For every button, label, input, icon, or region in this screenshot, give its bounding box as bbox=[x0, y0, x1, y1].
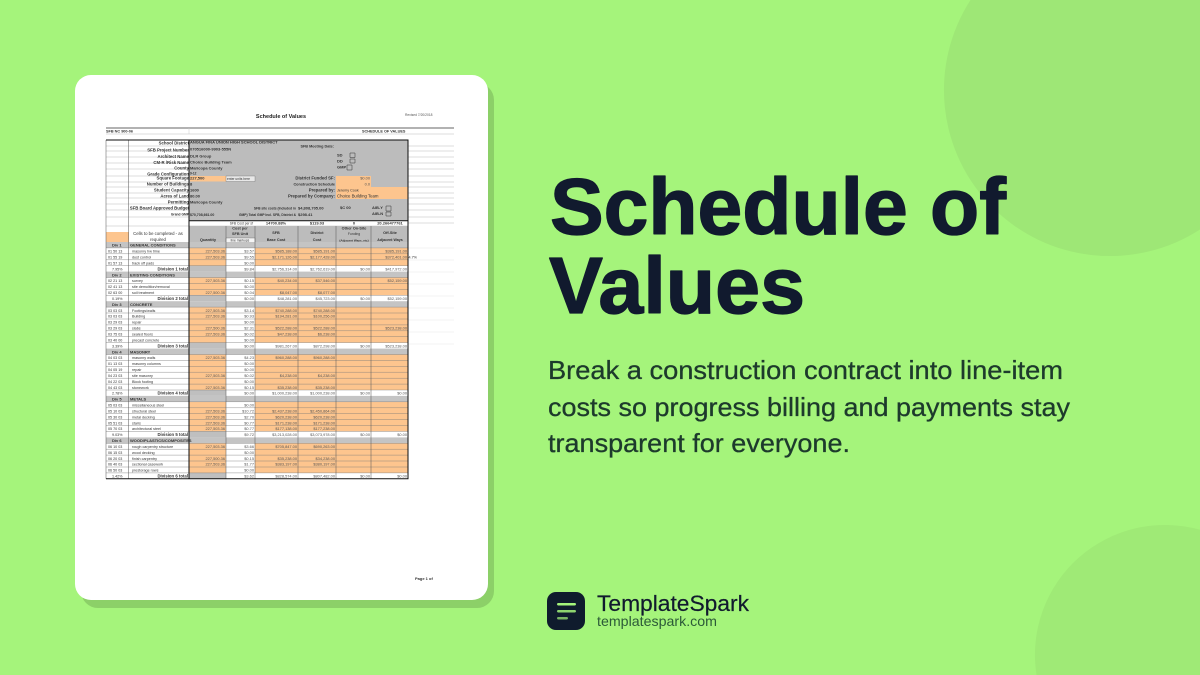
project information block: SFB Meeting Date: bbox=[300, 144, 334, 148]
column headers: Other On-Site bbox=[342, 226, 366, 230]
division 4 rows: 04 05 19 bbox=[108, 368, 122, 372]
decorative circle: bottom right bbox=[1035, 525, 1200, 675]
division 2 rows: $8,047.00 bbox=[280, 290, 298, 295]
division 1 rows: 01 50 13 bbox=[108, 250, 122, 254]
division 1 rows: track off pads bbox=[132, 262, 154, 266]
division 3 rows: $47,238.00 bbox=[278, 332, 298, 336]
division 3 rows: $2.31 bbox=[244, 326, 254, 331]
project information block: GMP) Total GMP Incl. SFB, District & bbox=[239, 213, 297, 217]
division 5 rows: $9.72 bbox=[244, 432, 254, 437]
division 6 rows: $3.66 bbox=[244, 444, 254, 449]
division 6 rows: $380,197.00 bbox=[313, 462, 336, 467]
division 1 rows: $417,972.00 bbox=[385, 266, 408, 271]
subtitle: costs so progress billing and payments stay bbox=[548, 392, 1070, 422]
division 1 rows: Division 1 total bbox=[157, 266, 188, 271]
form number row: SFB NC 900-06 bbox=[106, 130, 133, 134]
division 5 rows: $171,238.00 bbox=[313, 420, 336, 425]
division 5 rows: $2,437,238.00 bbox=[272, 408, 298, 414]
project information block: Maricopa County bbox=[190, 200, 223, 204]
division 2 rows: 02 63 00 bbox=[108, 291, 122, 295]
project information block: 227,500 bbox=[190, 176, 205, 180]
division 4 rows: repair bbox=[132, 368, 142, 372]
division 6 rows: 227,500.36 bbox=[206, 456, 225, 461]
division 3 rows: $740,288.00 bbox=[275, 308, 298, 313]
division 3 rows: $522,288.00 bbox=[275, 326, 298, 331]
division 3 rows bbox=[108, 302, 408, 348]
division 6 rows: Division 6 total bbox=[157, 474, 188, 479]
division 1 rows: $585,188.00 bbox=[275, 249, 298, 254]
division 6 rows: sectional casework bbox=[132, 463, 163, 467]
division 6 rows: 06 40 03 bbox=[108, 463, 122, 467]
division 2 rows: $40,234.00 bbox=[278, 278, 298, 283]
division 6 rows: $383,197.00 bbox=[275, 462, 298, 467]
division 4 rows: $4,238.00 bbox=[280, 373, 298, 378]
division 3 rows: repair bbox=[132, 321, 142, 325]
heading: Schedule of bbox=[550, 162, 1006, 251]
division 6 rows: $34,238.00 bbox=[316, 456, 336, 461]
project information block: AIB-Y bbox=[372, 205, 383, 210]
cost table fills bbox=[106, 140, 454, 479]
division 4 rows: stonework bbox=[132, 386, 149, 390]
division 3 rows: 03 29 03 bbox=[108, 321, 122, 325]
division 4 rows: 01 13 03 bbox=[108, 362, 122, 366]
division 5 rows: METALS bbox=[130, 397, 146, 402]
division 4 rows: $4.23 bbox=[244, 355, 254, 360]
project information block: enter units here bbox=[227, 177, 250, 181]
division 3 rows: precast concrete bbox=[132, 338, 159, 342]
division 5 rows: 05 70 03 bbox=[108, 427, 122, 431]
division 3 rows: Footings/walls bbox=[132, 309, 156, 313]
project information block: Construction Schedule bbox=[293, 182, 335, 186]
division 5 rows: 05 10 03 bbox=[108, 410, 122, 414]
division 5 rows: $0.00 bbox=[360, 432, 371, 437]
division 3 rows: slabs bbox=[132, 327, 141, 331]
division 4 rows: 04 22 03 bbox=[108, 380, 122, 384]
division 3 rows: $523,238.00 bbox=[385, 326, 408, 331]
column headers: SFB bbox=[272, 231, 280, 235]
division 6 rows: 227,503.36 bbox=[206, 444, 225, 449]
division 3 rows: $740,288.00 bbox=[313, 308, 336, 313]
division 5 rows: stairs bbox=[132, 421, 141, 425]
division 5 rows: Division 5 total bbox=[157, 432, 188, 437]
division 1 rows: $9.55 bbox=[244, 254, 254, 260]
division 6 rows: 227,503.36 bbox=[206, 462, 225, 467]
division 2 rows: 227,500.36 bbox=[206, 290, 225, 295]
division 5 rows: 227,503.36 bbox=[206, 420, 225, 425]
division 3 rows: 227,503.36 bbox=[206, 308, 225, 313]
division 3 rows: Building bbox=[132, 315, 145, 319]
division 5 rows: architectural steel bbox=[132, 427, 161, 431]
division 4 rows: 04 43 03 bbox=[108, 386, 122, 390]
division 6 rows: $0.15 bbox=[244, 456, 254, 461]
division 2 rows: Division 2 total bbox=[157, 296, 188, 301]
division 6 rows: Div 6 bbox=[112, 438, 122, 443]
division 6 rows: $0.00 bbox=[244, 450, 255, 455]
project information block: 8 bbox=[190, 182, 193, 186]
column headers: Quantity bbox=[200, 237, 217, 242]
division 5 rows: metal decking bbox=[132, 415, 155, 419]
project information block: 80.00 bbox=[190, 194, 201, 198]
division 4 rows: 227,503.36 bbox=[206, 373, 225, 378]
division 4 rows: site masonry bbox=[132, 374, 153, 378]
division 4 rows: $0.00 bbox=[397, 391, 408, 396]
division 3 rows: $0.00 bbox=[244, 343, 255, 348]
division 1 rows: 227,503.36 bbox=[206, 254, 225, 260]
project information block: Acres of Land bbox=[160, 194, 189, 198]
division 3 rows: $0.93 bbox=[244, 314, 254, 319]
project information block: SFB Board Approved Budget bbox=[130, 206, 190, 210]
icon: TemplateSpark logo bbox=[547, 592, 585, 630]
project information block bbox=[106, 140, 454, 226]
division 2 rows: $0.00 bbox=[244, 296, 255, 301]
division 1 rows: GENERAL CONDITIONS bbox=[130, 243, 176, 248]
division 5 rows: $0.77 bbox=[244, 426, 254, 431]
division 6 rows: $807,482.00 bbox=[313, 474, 336, 479]
project information block: Architect Name bbox=[157, 154, 190, 159]
division 2 rows: 0.19% bbox=[112, 297, 123, 301]
division 1 rows: $0.00 bbox=[360, 266, 371, 271]
division 4 rows: 04 23 03 bbox=[108, 374, 122, 378]
division 4 rows: 2.78% bbox=[112, 392, 123, 396]
division 2 rows: 227,503.36 bbox=[206, 278, 225, 283]
project information block: AIB-N bbox=[372, 211, 383, 216]
division 4 rows bbox=[108, 349, 408, 396]
division 2 rows: $0.00 bbox=[244, 284, 255, 289]
division 4 rows: $960,288.00 bbox=[313, 355, 336, 360]
division 5 rows: $171,238.00 bbox=[275, 420, 298, 425]
division 3 rows: $981,267.00 bbox=[275, 343, 298, 348]
division 4 rows: $1,000,238.00 bbox=[272, 391, 298, 396]
spreadsheet document bbox=[106, 113, 454, 581]
division 2 rows: $52,159.00 bbox=[388, 296, 408, 301]
division 6 rows: $705,847.00 bbox=[275, 444, 298, 449]
division 4 rows: $4,238.00 bbox=[318, 373, 336, 378]
project information block: CM-R /Risk Name bbox=[153, 160, 190, 165]
division 6 rows: 1.42% bbox=[112, 475, 123, 479]
project information block: 1600 bbox=[190, 188, 200, 192]
division 3 rows: $522,288.00 bbox=[313, 326, 336, 331]
summary row: SFB Cost per sf bbox=[230, 222, 253, 226]
division 2 rows: $37,546.00 bbox=[316, 278, 336, 283]
column headers: Base Cost bbox=[267, 238, 286, 242]
division 5 rows: $620,238.00 bbox=[313, 414, 336, 419]
division 6 rows: $0.00 bbox=[360, 474, 371, 479]
division 3 rows: 227,503.36 bbox=[206, 332, 225, 336]
division 6 rows: $828,574.00 bbox=[275, 474, 298, 479]
division 4 rows: $1,000,238.00 bbox=[310, 391, 336, 396]
subtitle: transparent for everyone. bbox=[548, 428, 850, 458]
project information block: 9-12 bbox=[190, 172, 197, 176]
project information block: Grand GMP bbox=[171, 212, 190, 216]
division 5 rows: 227,503.36 bbox=[206, 414, 225, 419]
subtitle: Break a construction contract into line-item bbox=[548, 355, 1063, 385]
division 4 rows: masonry walls bbox=[132, 356, 156, 360]
project information block: Grade Configuration bbox=[147, 172, 189, 176]
division 3 rows: 227,503.36 bbox=[206, 314, 225, 319]
division 3 rows: $3.14 bbox=[244, 308, 255, 313]
summary row: $119.03 bbox=[310, 220, 325, 226]
division 6 rows: $1.77 bbox=[244, 462, 254, 467]
division 2 rows: site demolition/removal bbox=[132, 285, 170, 289]
project information block: SD bbox=[337, 152, 343, 158]
division 5 rows: 05 03 03 bbox=[108, 404, 122, 408]
division 3 rows: $0.00 bbox=[244, 320, 255, 325]
project information block: School District bbox=[159, 140, 190, 146]
subtitle bbox=[548, 355, 1070, 458]
division 4 rows: $0.00 bbox=[244, 391, 255, 396]
project information block: County bbox=[174, 166, 190, 170]
division 4 rows: Block footing bbox=[132, 380, 153, 384]
division 6 rows: $0.00 bbox=[244, 468, 255, 473]
division 1 rows: $2,171,126.00 bbox=[272, 254, 298, 260]
column headers: Funding bbox=[348, 232, 360, 236]
division 3 rows: CONCRETE bbox=[130, 302, 153, 307]
division 3 rows: 03 03 03 bbox=[108, 315, 122, 319]
division 5 rows: $2.70 bbox=[244, 414, 255, 419]
division 1 rows: 01 55 19 bbox=[108, 256, 122, 260]
column headers: Off-Site bbox=[383, 231, 397, 235]
division 1 rows bbox=[108, 243, 418, 271]
division 5 rows: 227,503.36 bbox=[206, 426, 225, 431]
division 4 rows: $0.00 bbox=[244, 379, 255, 384]
division 1 rows: 227,503.36 bbox=[206, 249, 225, 254]
project information block: District Funded SF: bbox=[295, 176, 336, 180]
project information block: Student Capacity bbox=[154, 188, 190, 192]
project information block: Prepared by: bbox=[309, 188, 336, 192]
column headers: required bbox=[150, 237, 166, 242]
division 4 rows: 227,503.36 bbox=[206, 355, 225, 360]
division 4 rows: $35,238.00 bbox=[278, 385, 298, 390]
division 4 rows: $35,238.00 bbox=[316, 385, 336, 390]
division 1 rows: $9.84 bbox=[244, 266, 255, 271]
division 5 rows: 05 51 03 bbox=[108, 421, 122, 425]
project information block: DD bbox=[337, 158, 343, 164]
form number row: SCHEDULE OF VALUES bbox=[362, 130, 406, 134]
revision date: Revised 7/20/2018 bbox=[405, 113, 433, 117]
division 2 rows: $52,159.00 bbox=[388, 278, 408, 283]
division 5 rows: $0.00 bbox=[397, 432, 408, 437]
division 6 rows: $3.62 bbox=[244, 474, 254, 479]
division 6 rows: WOOD/PLASTICS/COMPOSITES bbox=[130, 438, 192, 443]
project information block: 070516000-9903-555N bbox=[190, 146, 231, 152]
division 6 rows: wood decking bbox=[132, 451, 155, 455]
division 5 rows: $10.72 bbox=[242, 408, 254, 414]
brand name: TemplateSpark bbox=[597, 591, 750, 616]
column headers: SFB Unit bbox=[232, 232, 249, 236]
division 3 rows: $0.00 bbox=[360, 343, 371, 348]
division 3 rows: 3.39% bbox=[112, 344, 123, 348]
column headers: line markups bbox=[231, 238, 250, 242]
division 4 rows: $0.15 bbox=[244, 385, 254, 390]
division 4 rows: $960,288.00 bbox=[275, 355, 298, 360]
division 2 rows: survey bbox=[132, 279, 143, 283]
project information block: SFB site costs (Included in bbox=[254, 206, 296, 210]
division 1 rows: 7.95% bbox=[112, 267, 123, 271]
division 6 rows: $35,238.00 bbox=[278, 456, 298, 461]
division 1 rows: $585,191.00 bbox=[313, 249, 336, 254]
summary row: 0 bbox=[353, 220, 356, 226]
division 1 rows: dust control bbox=[132, 256, 151, 260]
division 3 rows: $872,298.00 bbox=[313, 343, 336, 348]
division 4 rows: Div 4 bbox=[112, 349, 122, 354]
division 6 rows bbox=[108, 438, 408, 479]
summary row: 20.266477761 bbox=[377, 220, 404, 226]
division 5 rows bbox=[108, 397, 408, 437]
division 4 rows: $0.00 bbox=[244, 361, 255, 366]
column headers: (Adjacent Ways, etc) bbox=[339, 238, 369, 242]
division 2 rows: $0.00 bbox=[360, 296, 371, 301]
project information block: Maricopa County bbox=[190, 166, 223, 170]
division 1 rows: $3.57 bbox=[244, 249, 254, 254]
division 4 rows: MASONRY bbox=[130, 349, 151, 354]
division 6 rows: 06 15 03 bbox=[108, 451, 122, 455]
division 1 rows: 01 57 13 bbox=[108, 262, 122, 266]
division 3 rows: 03 40 00 bbox=[108, 338, 122, 342]
division 6 rows: $690,263.00 bbox=[313, 444, 336, 449]
division 5 rows: 05 30 03 bbox=[108, 415, 122, 419]
division 3 rows: Div 3 bbox=[112, 302, 122, 307]
division 2 rows: $0.15 bbox=[244, 278, 254, 283]
project information block: GMP bbox=[337, 164, 346, 170]
document title: Schedule of Values bbox=[256, 114, 306, 120]
column headers: Cost per bbox=[232, 226, 248, 230]
checkboxes bbox=[347, 153, 391, 216]
division 3 rows: 03 29 03 bbox=[108, 327, 122, 331]
project information block: 0.0 bbox=[365, 182, 371, 186]
column headers: Cells to be completed - as bbox=[133, 231, 183, 236]
heading bbox=[549, 162, 1006, 330]
column headers: District bbox=[310, 231, 324, 235]
project information block: $70,708,661.00 bbox=[190, 213, 214, 217]
project information block: Permitting bbox=[168, 200, 189, 204]
project information block: $298.41 bbox=[298, 212, 313, 217]
decorative circle: top right bbox=[944, 0, 1200, 256]
page number: Page 1 of bbox=[415, 576, 433, 581]
division 5 rows: miscellaneous steel bbox=[132, 404, 164, 408]
division 2 rows: EXISTING CONDITIONS bbox=[130, 272, 175, 277]
division 3 rows: $100,256.00 bbox=[313, 314, 336, 319]
division 2 rows: 02 21 13 bbox=[108, 279, 122, 283]
table frame bbox=[106, 140, 408, 479]
division 1 rows: Div 1 bbox=[112, 243, 122, 248]
column headers: Cost bbox=[313, 238, 322, 242]
division 5 rows: structural steel bbox=[132, 410, 156, 414]
division 2 rows: $0.04 bbox=[244, 290, 255, 295]
division 4 rows: Division 4 total bbox=[157, 391, 188, 396]
division 6 rows: prestorage rows bbox=[132, 469, 159, 473]
division 5 rows: $0.77 bbox=[244, 420, 254, 425]
division 2 rows: 02 41 13 bbox=[108, 285, 122, 289]
division 1 rows: $2,177,428.00 bbox=[310, 254, 336, 260]
division 3 rows: Division 3 total bbox=[157, 343, 188, 348]
division 5 rows: $177,238.00 bbox=[313, 426, 336, 431]
panel: document card bbox=[75, 75, 494, 608]
division 6 rows: finish carpentry bbox=[132, 457, 157, 461]
division 4 rows: $0.00 bbox=[244, 367, 255, 372]
form number row bbox=[106, 128, 454, 134]
division 1 rows: $2,756,314.00 bbox=[272, 266, 298, 271]
division 3 rows: $0.02 bbox=[244, 332, 254, 336]
project information block: Number of Buildings bbox=[147, 182, 190, 186]
project information block: SFB Project Number bbox=[147, 148, 189, 152]
division 4 rows: masonry columns bbox=[132, 362, 161, 366]
division 2 rows: $8,077.00 bbox=[318, 290, 336, 295]
division 1 rows: masonry hw time bbox=[132, 250, 160, 254]
division 3 rows: $523,238.00 bbox=[385, 343, 408, 348]
project information block: Jeremy Cook bbox=[337, 188, 359, 192]
division 4 rows: $0.02 bbox=[244, 373, 254, 378]
project information block: $4,808,705.00 bbox=[298, 206, 324, 210]
division 3 rows: 227,500.36 bbox=[206, 326, 225, 331]
division 2 rows: soil treatment bbox=[132, 291, 154, 295]
division 1 rows: $0.00 bbox=[244, 260, 255, 266]
division 4 rows: 04 03 03 bbox=[108, 356, 122, 360]
division 2 rows: $45,723.00 bbox=[316, 296, 336, 301]
division 1 rows: $2,762,619.00 bbox=[310, 266, 336, 271]
column headers bbox=[106, 226, 408, 243]
division 2 rows: Div 2 bbox=[112, 272, 122, 277]
division 3 rows: $0.00 bbox=[244, 337, 255, 342]
division 3 rows: sealed floors bbox=[132, 332, 153, 336]
division 6 rows: 06 10 03 bbox=[108, 445, 122, 449]
brand url: templatespark.com bbox=[597, 613, 717, 629]
summary row bbox=[230, 220, 404, 226]
division 6 rows: 06 20 03 bbox=[108, 457, 122, 461]
division 2 rows: $48,281.00 bbox=[278, 296, 298, 301]
division 1 rows: $385,191.00 bbox=[385, 249, 408, 254]
project information block: Choice Building Team bbox=[190, 160, 232, 164]
division 5 rows: 227,503.36 bbox=[206, 408, 225, 414]
project information block: Choice Building Team bbox=[337, 194, 379, 198]
division 1 rows: 4.7% bbox=[408, 256, 418, 260]
division 5 rows: $3,073,978.00 bbox=[310, 432, 336, 437]
column headers: Adjacent Ways bbox=[377, 238, 403, 242]
division 6 rows: 06 50 03 bbox=[108, 469, 122, 473]
division 6 rows: rough carpentry structure bbox=[132, 445, 173, 449]
division 5 rows: 9.03% bbox=[112, 433, 123, 437]
division 3 rows: 03 03 03 bbox=[108, 309, 122, 313]
division 5 rows: $3,213,028.00 bbox=[272, 432, 298, 437]
division 5 rows: Div 5 bbox=[112, 397, 122, 402]
division 5 rows: $620,238.00 bbox=[275, 414, 298, 419]
division 3 rows: $194,281.00 bbox=[275, 314, 298, 319]
division 5 rows: $0.00 bbox=[244, 402, 255, 408]
project information block: Prepared by Company: bbox=[288, 194, 336, 198]
division 1 rows: $372,401.00 bbox=[385, 254, 408, 260]
division 5 rows: $177,138.00 bbox=[275, 426, 298, 431]
project information block: ANGUA FINA UNION HIGH SCHOOL DISTRICT bbox=[190, 140, 278, 144]
project information block: DLR Group bbox=[190, 154, 212, 158]
summary row: 14700.88% bbox=[266, 220, 287, 226]
heading: Values bbox=[549, 241, 805, 330]
division 4 rows: $0.00 bbox=[360, 391, 371, 396]
division 4 rows: 227,503.36 bbox=[206, 385, 225, 390]
project information block: Square Footage bbox=[157, 176, 190, 180]
division 6 rows: $0.00 bbox=[397, 474, 408, 479]
project information block: $0.00 bbox=[360, 176, 371, 180]
division 3 rows: 03 75 03 bbox=[108, 332, 122, 336]
division 3 rows: $6,238.00 bbox=[318, 332, 336, 336]
project information block: $C 00 bbox=[340, 205, 351, 210]
division 5 rows: $2,450,864.00 bbox=[310, 408, 336, 414]
division 2 rows bbox=[108, 272, 408, 301]
